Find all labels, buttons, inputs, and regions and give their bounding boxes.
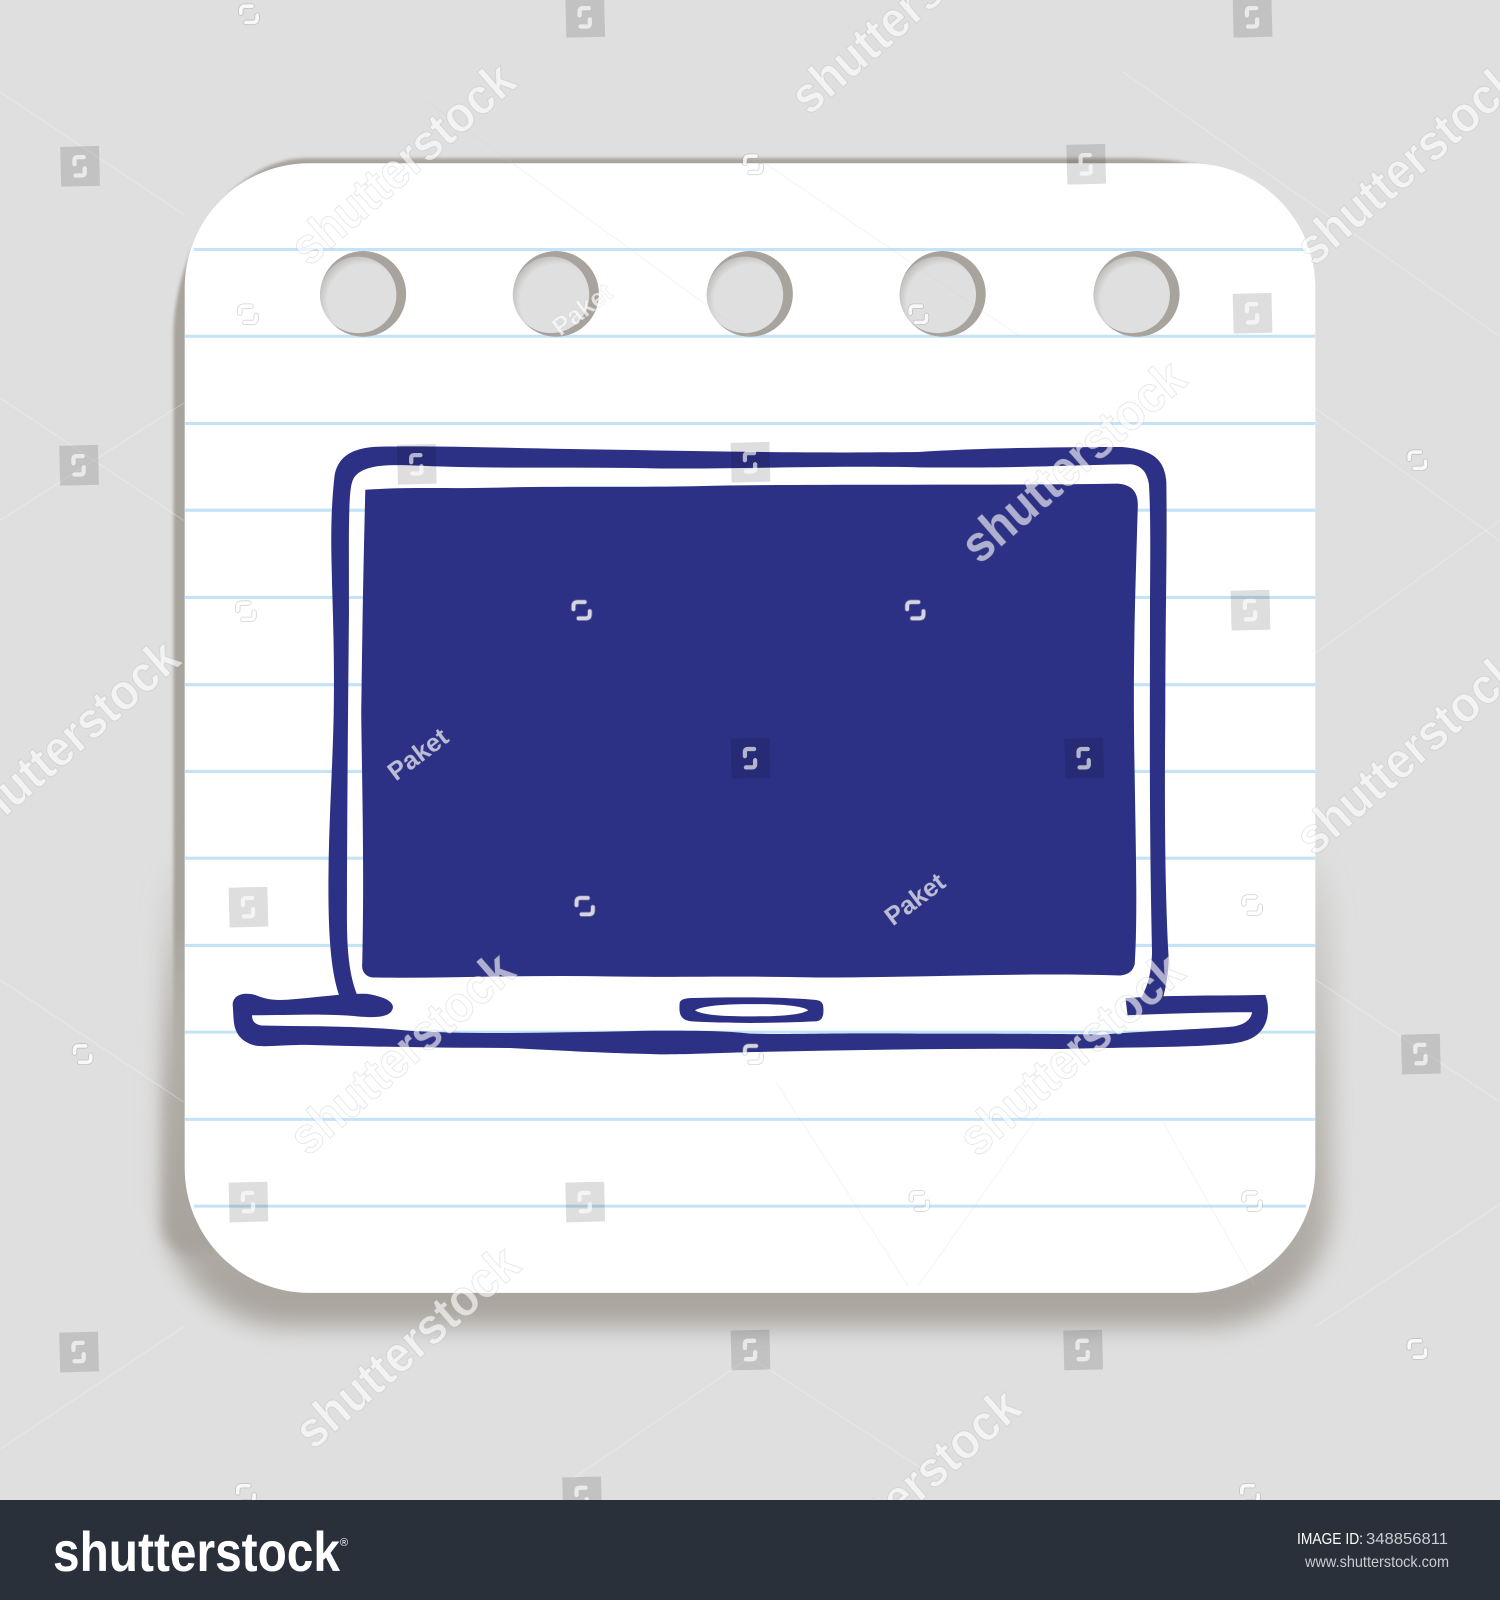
watermarks: shutterstock [947,941,1195,1166]
laptop base [233,994,1268,1054]
image number: 348856811 [1366,1531,1448,1548]
laptop lid frame [328,446,1169,997]
card shadow [163,158,1332,1327]
ruled lines [185,249,1315,1206]
footer bar [0,1500,1500,1600]
registered mark: ® [340,1537,348,1549]
image id: IMAGE ID: [1297,1531,1363,1548]
footer logo: shutterstock [53,1520,341,1583]
site url: www.shutterstock.com [1304,1554,1449,1571]
watermarks: Paket [547,278,619,342]
watermarks: Paket [880,868,951,931]
watermarks: shutterstock [283,1234,530,1459]
binder holes [320,251,1180,337]
notepad card [185,163,1315,1293]
watermarks: shutterstock [278,940,525,1165]
watermarks: shutterstock [279,50,526,276]
watermarks: shutterstock [949,348,1197,574]
watermarks: shutterstock [784,1377,1031,1600]
watermarks: Paket [383,723,454,786]
touchpad slot [679,997,823,1023]
laptop screen [361,484,1138,978]
icon: laptop doodle [233,446,1268,1054]
